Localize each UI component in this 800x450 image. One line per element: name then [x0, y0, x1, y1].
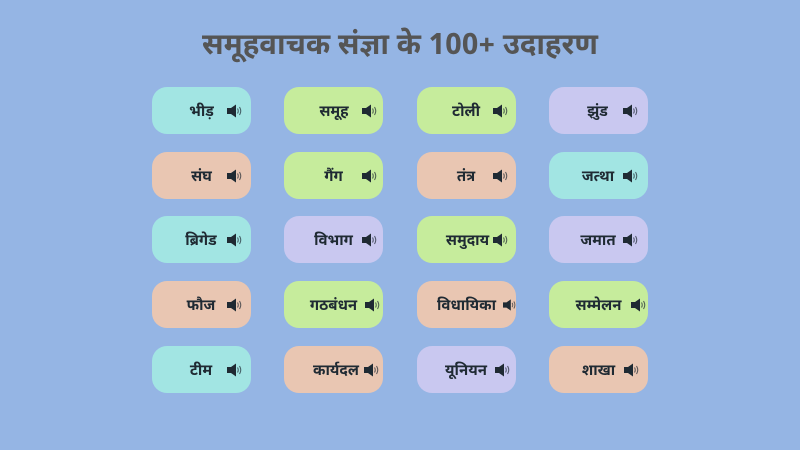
card: फौज: [152, 281, 251, 328]
card: जत्था: [549, 152, 648, 199]
card: टोली: [417, 87, 516, 134]
title: समूहवाचक संज्ञा के 100+ उदाहरण: [202, 28, 598, 66]
card: संघ: [152, 152, 251, 199]
card: टीम: टीम: [190, 363, 212, 382]
card: टोली: टोली: [452, 104, 480, 123]
card: विभाग: [284, 216, 383, 263]
card: जमात: [549, 216, 648, 263]
card: तंत्र: [417, 152, 516, 199]
card: जमात: जमात: [580, 233, 616, 252]
card: यूनियन: [417, 346, 516, 393]
card: गैंग: [284, 152, 383, 199]
card: सम्मेलन: [549, 281, 648, 328]
card: समुदाय: समुदाय: [446, 233, 489, 252]
card: भीड़: भीड़: [189, 104, 214, 123]
card: तंत्र: तंत्र: [457, 169, 475, 188]
card: विधायिका: विधायिका: [437, 298, 496, 317]
card: समूह: समूह: [319, 104, 349, 123]
card: भीड़: [152, 87, 251, 134]
card: गैंग: गैंग: [324, 169, 343, 188]
card: शाखा: शाखा: [582, 363, 615, 382]
card: संघ: संघ: [191, 169, 212, 188]
card: समुदाय: [417, 216, 516, 263]
card: टीम: [152, 346, 251, 393]
card: फौज: फौज: [187, 298, 215, 317]
card: गठबंधन: [284, 281, 383, 328]
card: कार्यदल: कार्यदल: [313, 363, 359, 382]
card: ब्रिगेड: ब्रिगेड: [185, 233, 217, 252]
card: जत्था: जत्था: [582, 169, 614, 188]
card: कार्यदल: [284, 346, 383, 393]
card: शाखा: [549, 346, 648, 393]
card: विभाग: विभाग: [314, 233, 353, 252]
card: झुंड: [549, 87, 648, 134]
card: गठबंधन: गठबंधन: [310, 298, 357, 317]
card: समूह: [284, 87, 383, 134]
card: सम्मेलन: सम्मेलन: [576, 298, 621, 317]
card: यूनियन: यूनियन: [445, 363, 487, 382]
card: झुंड: झुंड: [587, 104, 608, 123]
card: विधायिका: [417, 281, 516, 328]
card: ब्रिगेड: [152, 216, 251, 263]
